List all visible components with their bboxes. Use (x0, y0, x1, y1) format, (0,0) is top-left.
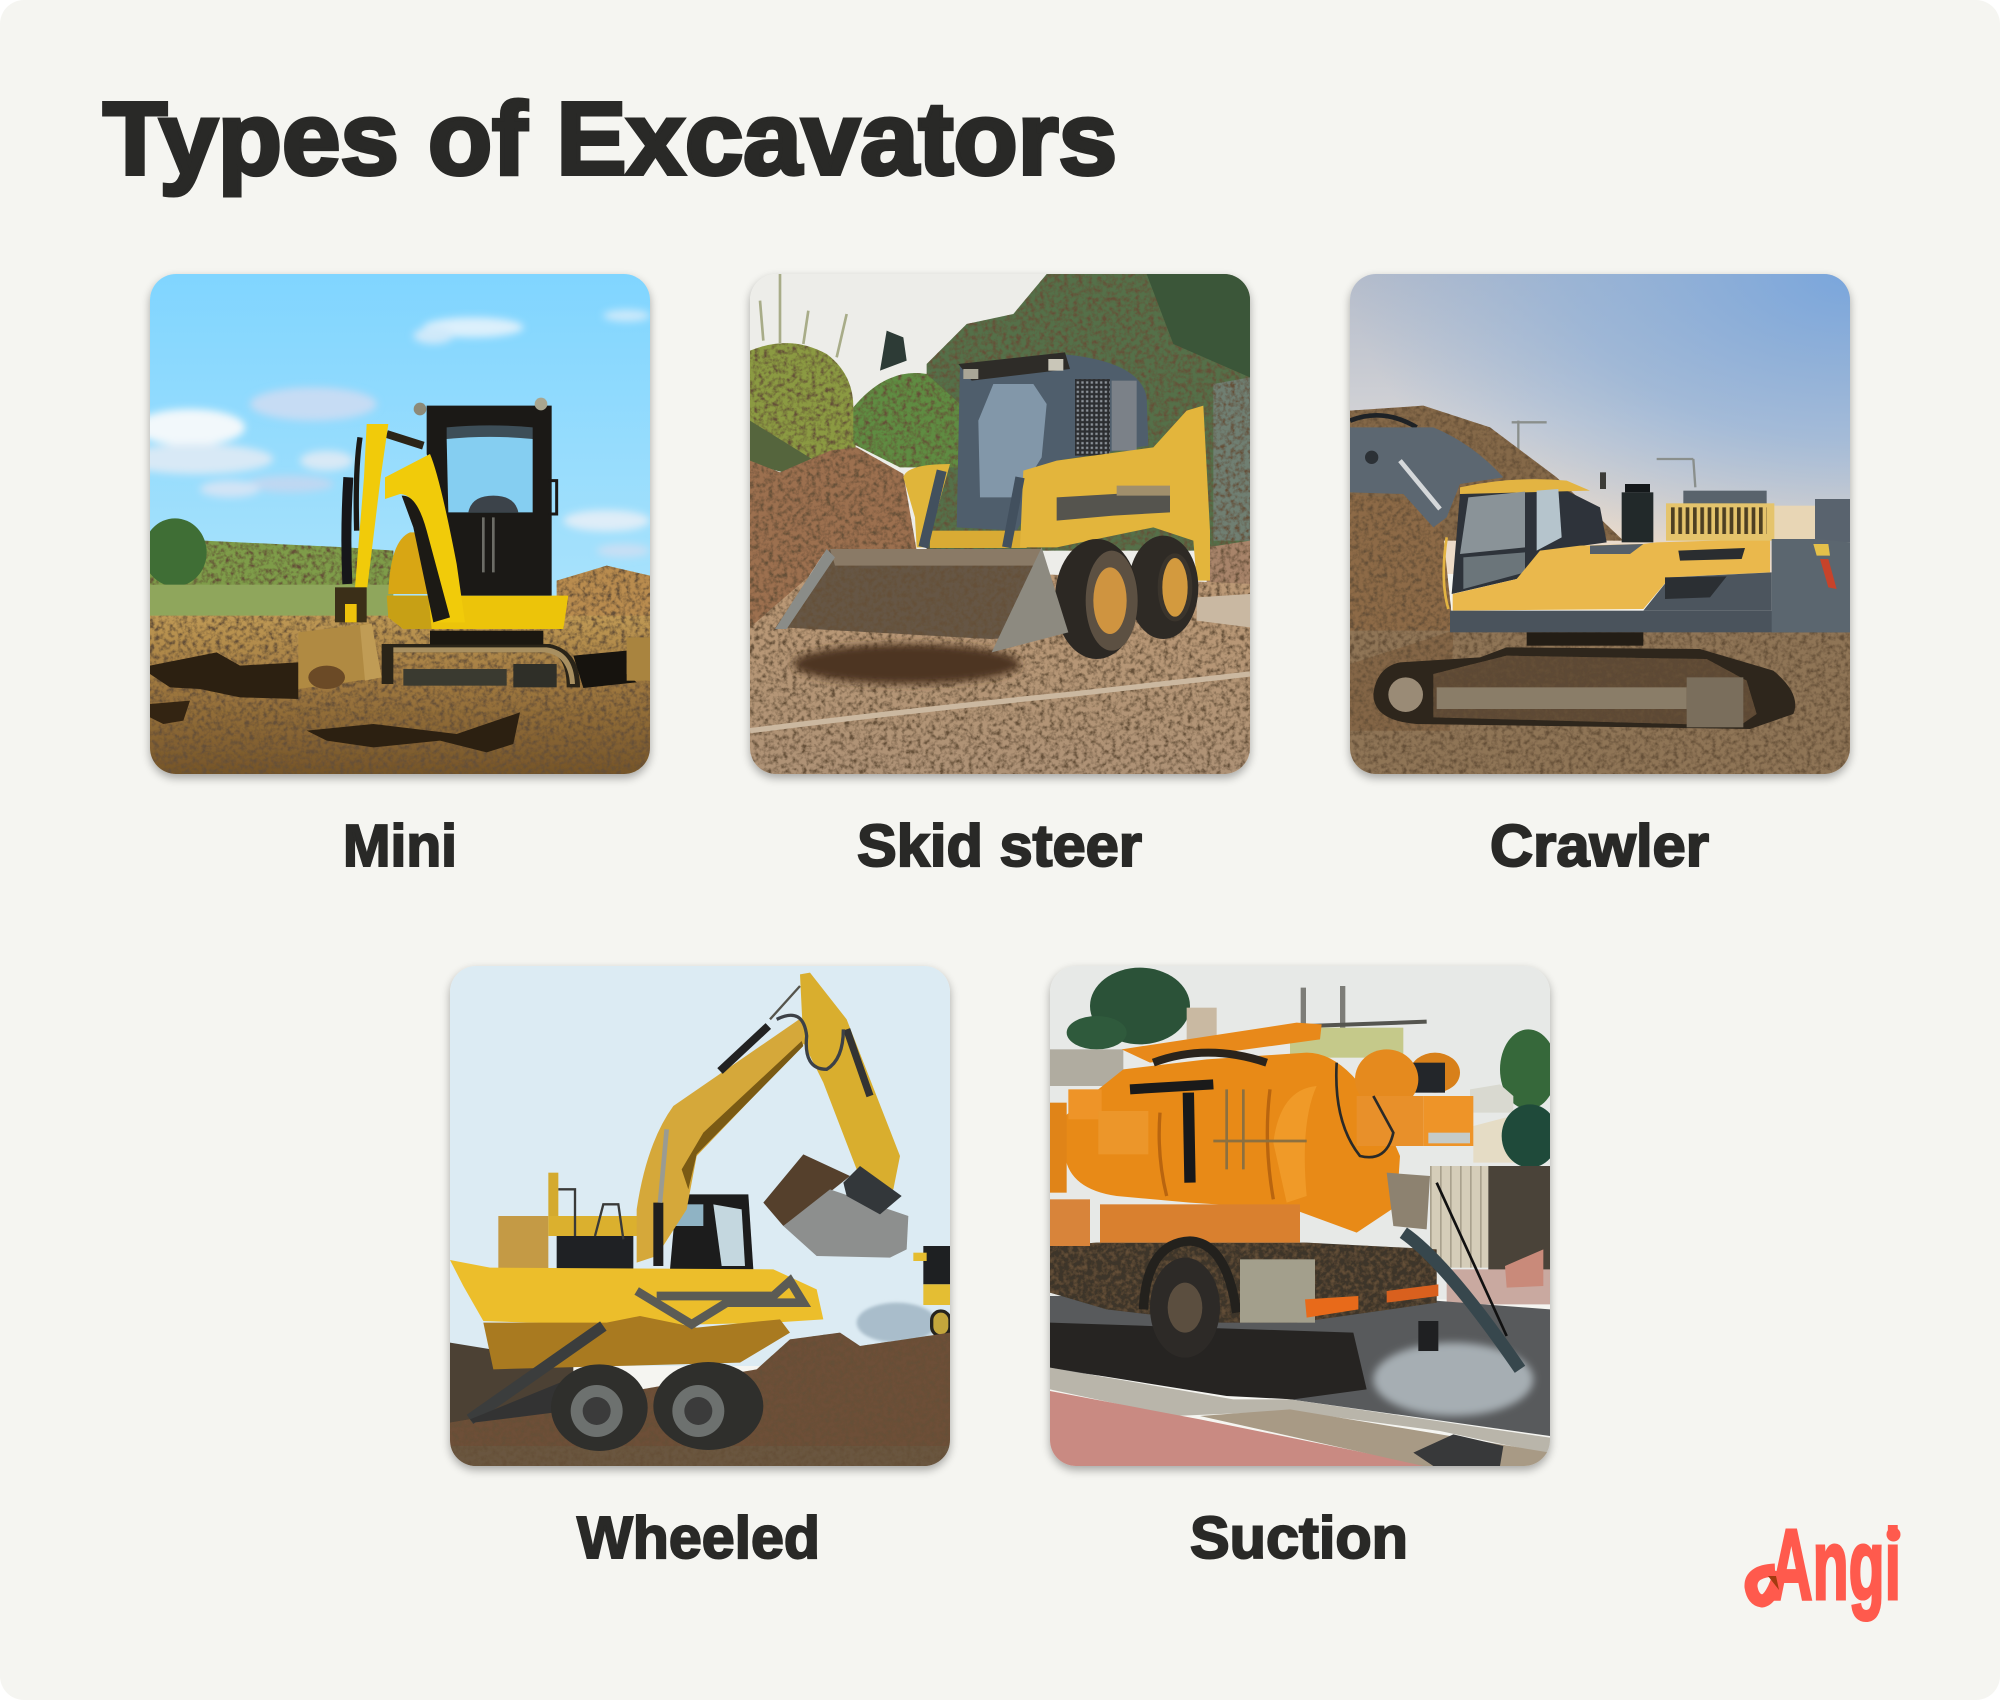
crawler body (1373, 472, 1850, 729)
soil mound (750, 447, 917, 631)
skid steer loader (773, 352, 1210, 659)
sky (150, 274, 650, 641)
excavator upper (498, 973, 908, 1273)
trees and houses (1050, 968, 1558, 1168)
sky (750, 274, 1250, 607)
far soil right (1207, 541, 1250, 597)
sky (1050, 966, 1550, 1299)
panel: Wheeled (444, 964, 956, 1571)
panel: Suction (1044, 964, 1556, 1571)
label: Wheeled: Wheeled (577, 1505, 820, 1571)
logo: Angi (1744, 1509, 1901, 1622)
background trees (857, 1303, 937, 1343)
suction truck (1050, 1023, 1520, 1369)
panel: Mini (144, 272, 656, 879)
label: Mini: Mini (343, 813, 457, 879)
dirt ground (750, 564, 1250, 774)
photo: suction excavator (1050, 966, 1550, 1466)
panel: Skid steer (744, 272, 1256, 879)
soil pile and ground (450, 1333, 950, 1466)
sky (1350, 274, 1850, 574)
trees and bushes (750, 274, 1250, 551)
background buildings and cranes (1512, 421, 1850, 542)
photo: crawler excavator (1350, 274, 1850, 774)
photo: wheeled excavator (450, 966, 950, 1466)
ground (1350, 631, 1850, 774)
fence (1430, 1166, 1550, 1271)
label: Suction: Suction (1190, 1505, 1408, 1571)
soil ground (150, 566, 650, 774)
panel: Crawler (1344, 272, 1856, 879)
label: Skid steer: Skid steer (857, 813, 1142, 879)
sky (450, 966, 950, 1366)
dirt mound (1350, 406, 1623, 671)
title: Types of Excavators (103, 81, 1117, 196)
hill and tree (143, 518, 393, 618)
dump truck (450, 1260, 823, 1451)
photo: skid steer (750, 274, 1250, 774)
label: Crawler: Crawler (1490, 813, 1709, 879)
excavator (298, 398, 650, 689)
background machine (913, 1246, 950, 1336)
photo: mini excavator (150, 274, 650, 774)
pavement, road and water (1050, 1249, 1550, 1466)
boom arm (1350, 415, 1503, 527)
clouds (120, 310, 650, 557)
